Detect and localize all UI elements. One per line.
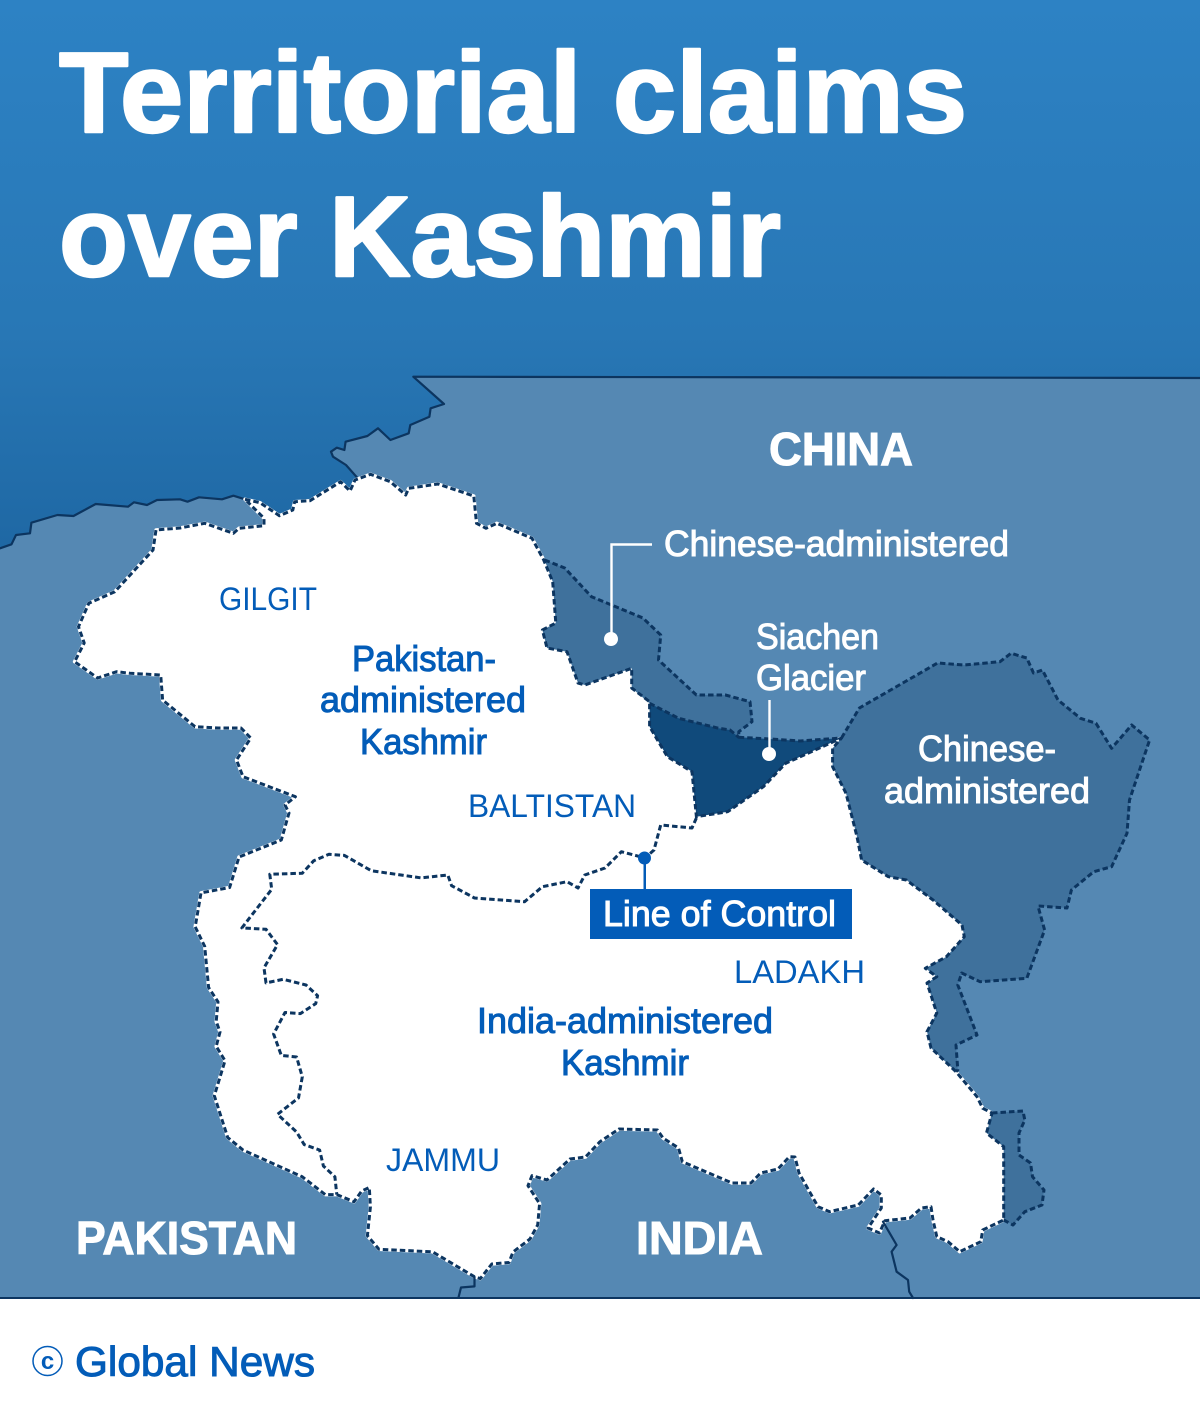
callout: Siachen Glacier bbox=[756, 616, 879, 761]
disputed borders (dashed) bbox=[75, 474, 1150, 1279]
label: India-administered Kashmir bbox=[477, 1000, 773, 1083]
label: GILGIT: GILGIT bbox=[219, 581, 317, 617]
footer credit: Global News: c bbox=[41, 1348, 54, 1375]
label: Chinese-administered east: Chinese- bbox=[918, 728, 1056, 769]
map bbox=[0, 377, 1200, 1299]
Chinese-administered: eastern tract bbox=[833, 653, 1150, 1072]
label: Pakistan-administered Kashmir: administered bbox=[320, 679, 526, 720]
label: BALTISTAN: BALTISTAN bbox=[468, 788, 636, 824]
Chinese-administered: southern tract bbox=[986, 1111, 1044, 1225]
label: Pakistan-administered Kashmir bbox=[320, 638, 526, 762]
Siachen Glacier bbox=[650, 703, 842, 817]
label: Chinese-administered east: administered bbox=[884, 770, 1090, 811]
callout: Chinese-administered: Chinese-administered bbox=[664, 523, 1009, 564]
header background bbox=[0, 0, 1200, 560]
title: Territorial claims bbox=[59, 30, 967, 157]
footer credit: Global News: Global News bbox=[75, 1338, 315, 1385]
label: Pakistan-administered Kashmir: Kashmir bbox=[360, 721, 487, 762]
label: LADAKH: LADAKH bbox=[734, 954, 865, 990]
callout: Line of Control: Line of Control bbox=[603, 893, 836, 934]
title bbox=[59, 30, 967, 301]
rivers / international borders bbox=[458, 1222, 913, 1298]
border: northern solid line bbox=[0, 377, 1200, 548]
map bottom edge bbox=[0, 1297, 1200, 1299]
label: CHINA: CHINA bbox=[769, 423, 913, 475]
label: JAMMU: JAMMU bbox=[386, 1142, 500, 1178]
label: Pakistan-administered Kashmir: Pakistan- bbox=[352, 638, 496, 679]
callout: Line of Control bbox=[590, 852, 852, 939]
Kashmir administered territory (white) bbox=[75, 474, 1004, 1279]
label: India-administered Kashmir: India-administered bbox=[477, 1000, 773, 1041]
label: India-administered Kashmir: Kashmir bbox=[561, 1042, 689, 1083]
label: PAKISTAN: PAKISTAN bbox=[76, 1212, 297, 1264]
callout: Siachen Glacier: Siachen bbox=[756, 616, 879, 657]
neighbouring land bbox=[0, 377, 1200, 1298]
label: INDIA: INDIA bbox=[636, 1212, 763, 1264]
title: over Kashmir bbox=[59, 174, 781, 301]
Chinese-administered: northwest tract bbox=[542, 560, 752, 737]
label: Chinese-administered east bbox=[884, 728, 1090, 811]
callout: Chinese-administered bbox=[604, 523, 1009, 646]
callout: Siachen Glacier: Glacier bbox=[756, 657, 866, 698]
